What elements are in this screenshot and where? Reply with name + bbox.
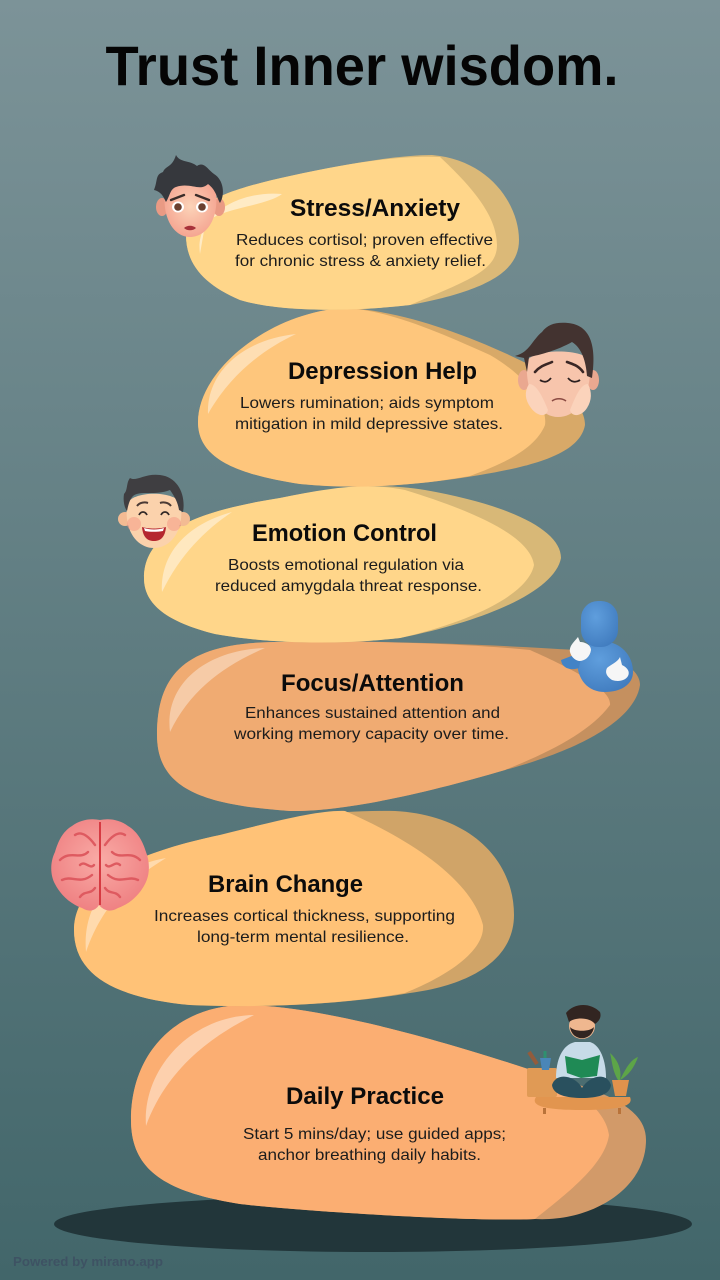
icon: brain <box>51 819 149 911</box>
icon: blue figure with gloves <box>561 601 633 692</box>
description: mitigation in mild depressive states. <box>235 416 503 433</box>
description: working memory capacity over time. <box>233 726 509 743</box>
highlight <box>199 194 282 254</box>
description: Reduces cortisol; proven effective <box>236 232 493 249</box>
heading: Daily Practice <box>286 1083 444 1110</box>
description: long-term mental resilience. <box>197 929 409 946</box>
panel: depression help <box>198 308 585 487</box>
panel: stress anxiety <box>186 155 519 310</box>
heading: Focus/Attention <box>281 670 464 697</box>
title: Trust Inner wisdom. <box>106 34 618 97</box>
highlight <box>162 512 232 592</box>
panel: brain change <box>74 811 514 1006</box>
highlight <box>208 334 296 414</box>
ground shadow <box>54 1196 692 1252</box>
icon: man reading on table <box>527 1005 638 1114</box>
footer credit: Powered by mirano.app <box>13 1254 163 1269</box>
panel: emotion control <box>144 486 561 643</box>
description: Increases cortical thickness, supporting <box>154 908 455 925</box>
icon: worried boy head <box>154 155 225 237</box>
description: Lowers rumination; aids symptom <box>240 395 494 412</box>
heading: Depression Help <box>288 358 477 385</box>
panel: daily practice <box>131 1005 646 1220</box>
description: Boosts emotional regulation via <box>228 557 464 574</box>
description: Enhances sustained attention and <box>245 705 500 722</box>
highlight <box>86 858 166 952</box>
panel: focus attention <box>157 642 640 811</box>
highlight <box>169 648 265 732</box>
description: anchor breathing daily habits. <box>258 1147 481 1164</box>
description: reduced amygdala threat response. <box>215 578 482 595</box>
heading: Brain Change <box>208 871 363 898</box>
icon: sad man head <box>515 323 599 417</box>
icon: happy boy head <box>118 475 190 548</box>
highlight <box>146 1015 254 1126</box>
heading: Stress/Anxiety <box>290 195 461 222</box>
description: for chronic stress & anxiety relief. <box>235 253 486 270</box>
heading: Emotion Control <box>252 520 437 547</box>
description: Start 5 mins/day; use guided apps; <box>243 1126 506 1143</box>
